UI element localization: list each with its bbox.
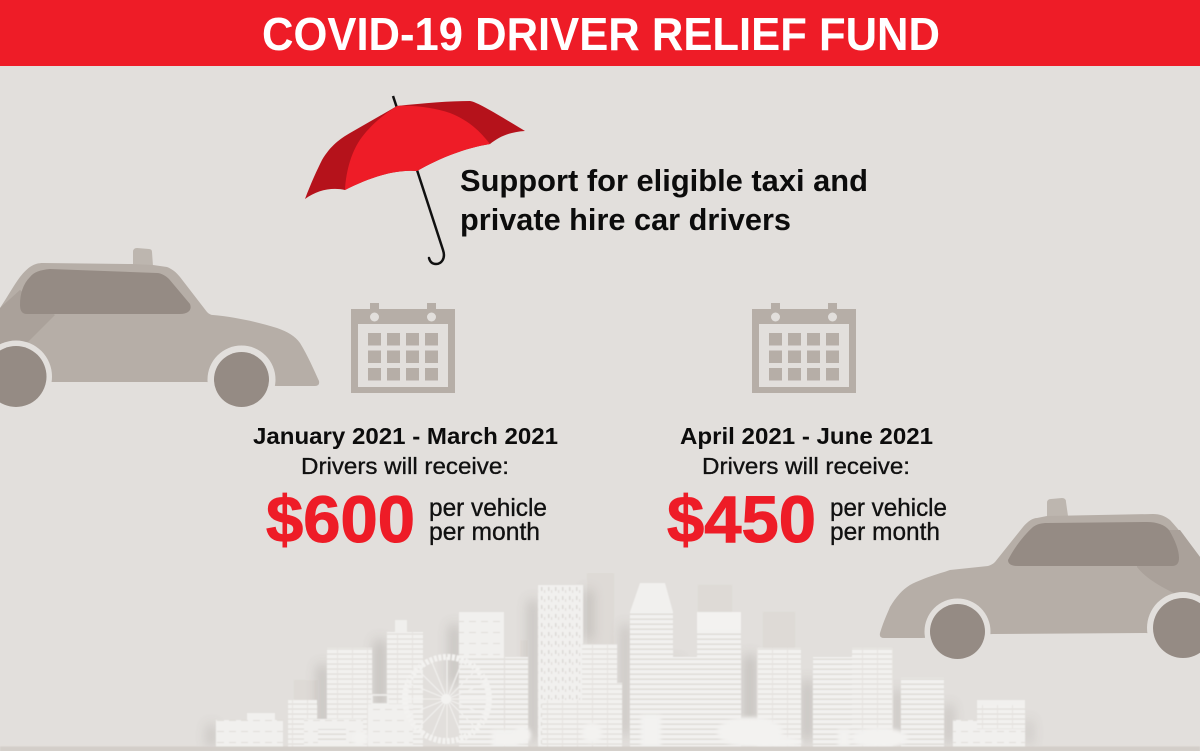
panel: January to March payment bbox=[253, 423, 558, 556]
per vehicle per month left: per vehicle bbox=[429, 494, 547, 522]
subtitle: Support for eligible taxi and bbox=[460, 163, 868, 198]
buildings left bbox=[327, 648, 372, 747]
building shadows bbox=[208, 590, 1031, 747]
skyline bbox=[0, 573, 1200, 751]
icon: red umbrella bbox=[305, 96, 525, 264]
panel: April to June payment bbox=[667, 423, 947, 556]
trees and low structures bbox=[352, 715, 908, 748]
amount $450: $450 bbox=[667, 482, 816, 556]
icon: calendar right bbox=[752, 303, 856, 393]
title: COVID-19 DRIVER RELIEF FUND bbox=[262, 8, 940, 60]
per vehicle per month right: per month bbox=[830, 518, 940, 546]
per vehicle per month left: per month bbox=[429, 518, 540, 546]
per vehicle per month left bbox=[429, 494, 547, 546]
date range right: April 2021 - June 2021 bbox=[680, 423, 933, 449]
per vehicle per month right bbox=[830, 494, 947, 546]
faint background towers bbox=[294, 573, 795, 705]
per vehicle per month right: per vehicle bbox=[830, 494, 947, 522]
date range left: January 2021 - March 2021 bbox=[253, 423, 558, 449]
ferris wheel bbox=[405, 657, 489, 741]
drivers will receive left: Drivers will receive: bbox=[301, 453, 509, 479]
icon: left taxi bbox=[0, 248, 319, 416]
subtitle bbox=[460, 163, 868, 237]
drivers will receive right: Drivers will receive: bbox=[702, 453, 910, 479]
header band bbox=[0, 0, 1200, 66]
tall towers bbox=[459, 612, 504, 747]
subtitle: private hire car drivers bbox=[460, 202, 791, 237]
amount $600: $600 bbox=[266, 482, 415, 556]
buildings centre and right bbox=[630, 583, 673, 612]
icon: calendar left bbox=[351, 303, 455, 393]
icon: right taxi bbox=[880, 498, 1200, 667]
ground strip bbox=[0, 746, 1200, 751]
